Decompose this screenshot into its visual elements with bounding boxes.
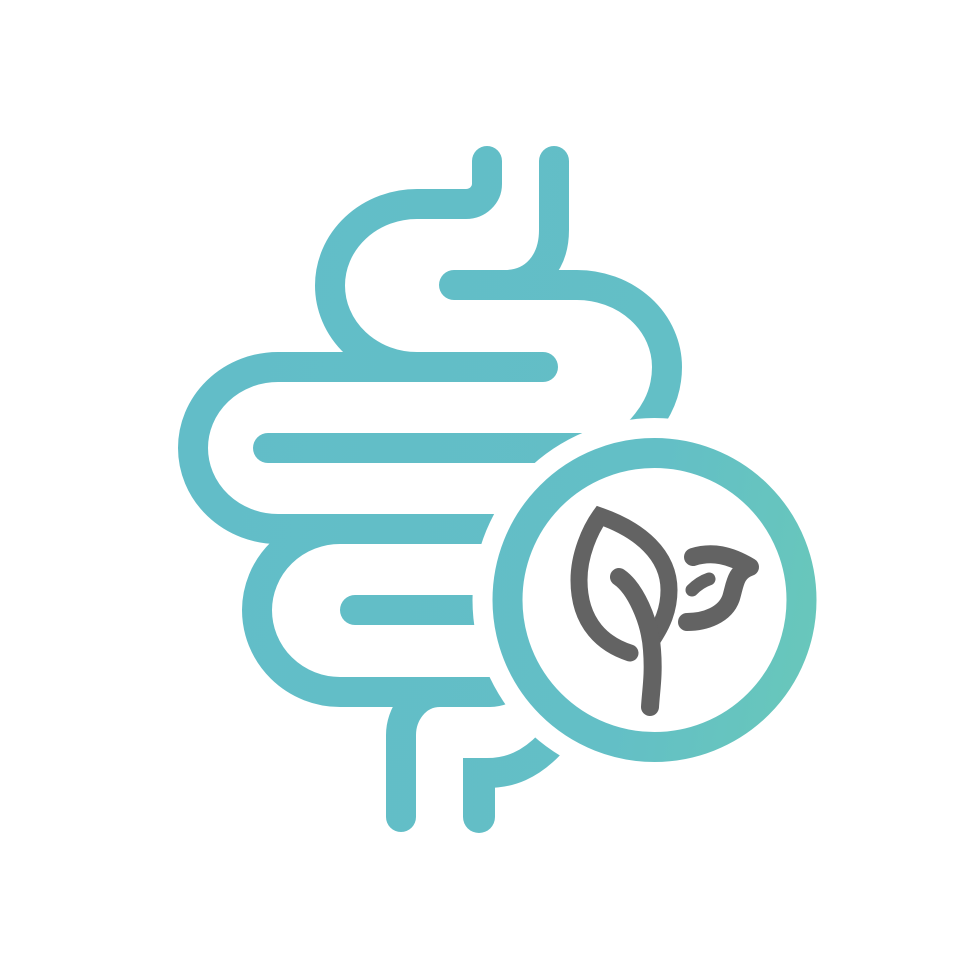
- icon: plant sprout: [579, 516, 750, 707]
- upper right tube and bend: [505, 161, 554, 285]
- small leaf: [687, 554, 750, 622]
- left exit tube: [401, 692, 440, 817]
- icon: intestine outline: [193, 161, 667, 817]
- lower intestine loop: [257, 529, 520, 692]
- badge: teal circle: [508, 453, 802, 747]
- small leaf vein: [692, 579, 709, 590]
- right exit tube: [463, 744, 550, 817]
- middle intestine loop: [193, 367, 525, 529]
- middle inner fold: [268, 433, 610, 463]
- badge: white gap around circle: [472, 418, 836, 782]
- large leaf: [579, 516, 669, 653]
- upper intestine loop: [330, 161, 543, 367]
- stem: [619, 577, 653, 707]
- lower inner fold: [355, 595, 520, 625]
